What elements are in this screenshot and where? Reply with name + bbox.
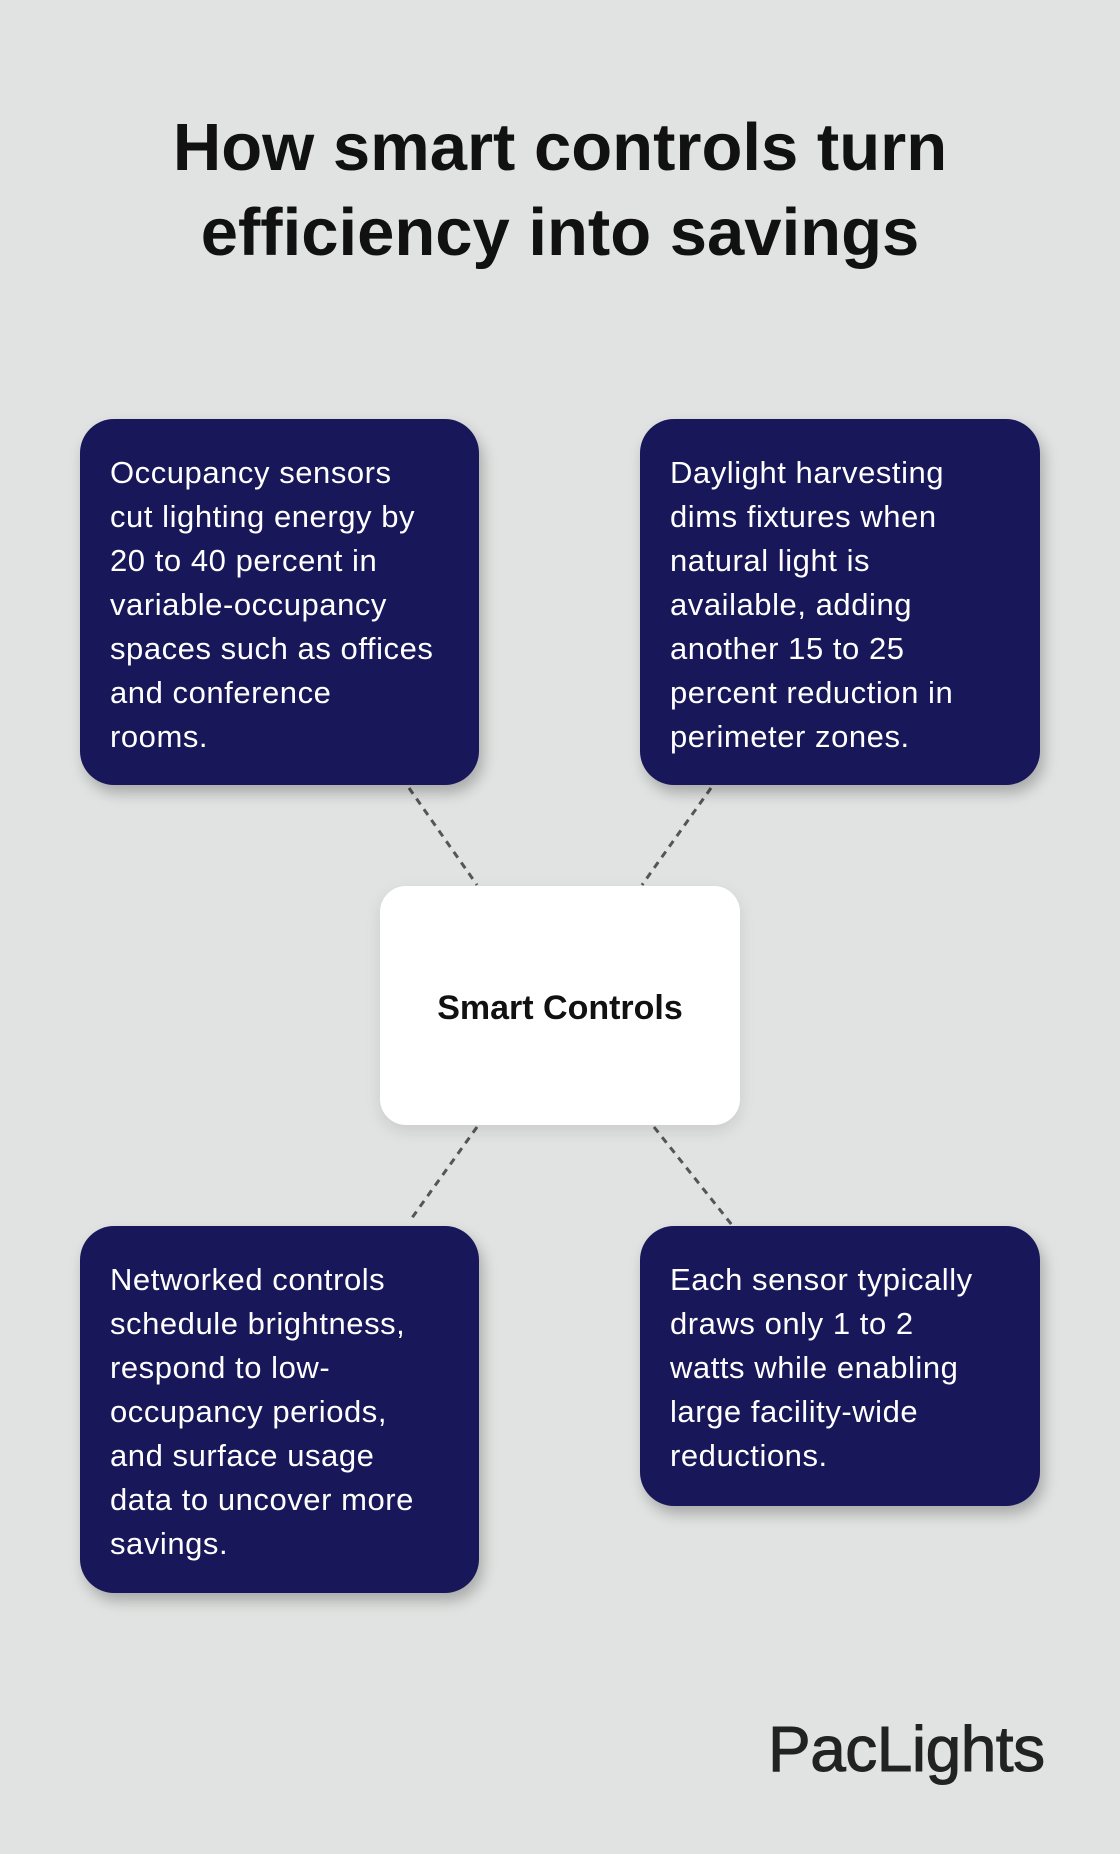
panel: sensor wattage: draws only 1 to 2 (670, 1306, 914, 1341)
panel: daylight harvesting: Daylight harvesting (670, 455, 944, 490)
panel: occupancy sensors: cut lighting energy by (110, 499, 415, 534)
panel: networked controls: respond to low- (110, 1350, 330, 1385)
panel: networked controls: Networked controls (110, 1262, 385, 1297)
panel: occupancy sensors: variable-occupancy (110, 587, 387, 622)
center node (380, 886, 740, 1125)
panel: occupancy sensors: 20 to 40 percent in (110, 543, 377, 578)
center node: Smart Controls (437, 989, 683, 1027)
panel: daylight harvesting: perimeter zones. (670, 719, 910, 754)
title: How smart controls turn (173, 110, 947, 185)
panel: occupancy sensors: and conference (110, 675, 331, 710)
panel: networked controls (80, 1226, 479, 1593)
logo: PacLights (768, 1713, 1045, 1785)
panel: daylight harvesting: natural light is (670, 543, 870, 578)
panel: networked controls: schedule brightness, (110, 1306, 405, 1341)
panel: networked controls: data to uncover more (110, 1482, 414, 1517)
panel: networked controls: occupancy periods, (110, 1394, 387, 1429)
title: efficiency into savings (201, 195, 919, 270)
panel: occupancy sensors (80, 419, 479, 785)
panel: occupancy sensors: rooms. (110, 719, 208, 754)
panel: sensor wattage (640, 1226, 1040, 1506)
panel: occupancy sensors: spaces such as offices (110, 631, 433, 666)
panel: sensor wattage: watts while enabling (670, 1350, 958, 1385)
panel: daylight harvesting: another 15 to 25 (670, 631, 905, 666)
panel: sensor wattage: large facility-wide (670, 1394, 918, 1429)
panel: networked controls: savings. (110, 1526, 228, 1561)
panel: daylight harvesting: available, adding (670, 587, 912, 622)
panel: daylight harvesting: percent reduction in (670, 675, 953, 710)
panel: daylight harvesting: dims fixtures when (670, 499, 937, 534)
panel: sensor wattage: Each sensor typically (670, 1262, 973, 1297)
title (173, 110, 947, 270)
panel: sensor wattage: reductions. (670, 1438, 828, 1473)
panel: daylight harvesting (640, 419, 1040, 785)
panel: occupancy sensors: Occupancy sensors (110, 455, 392, 490)
panel: networked controls: and surface usage (110, 1438, 374, 1473)
